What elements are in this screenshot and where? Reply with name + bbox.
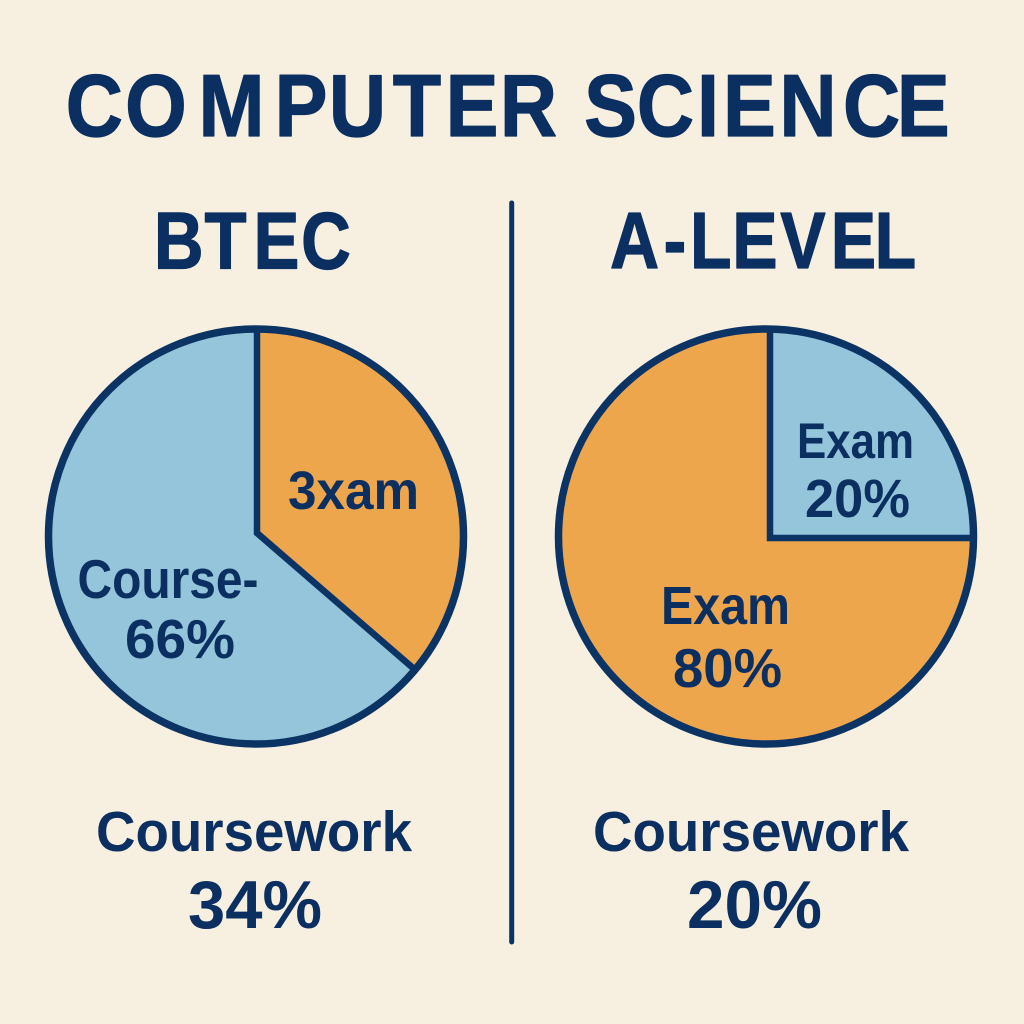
label: Exam (large): Exam <box>661 576 790 636</box>
caption label: Coursework <box>96 800 412 864</box>
heading: BTEC: BTEC <box>154 195 351 286</box>
BTEC coursework caption <box>96 800 412 943</box>
panel: A-Level pie chart <box>558 329 974 744</box>
label: 3xam: 3xam <box>288 461 419 521</box>
pie outline and dividers <box>558 329 974 744</box>
label: 80%: 80% <box>673 637 782 699</box>
slice: exam 34% <box>256 329 463 670</box>
slice: coursework 66% <box>48 329 464 744</box>
label: Exam (quarter): Exam <box>797 413 914 469</box>
A-Level coursework caption <box>593 800 909 943</box>
heading: A-LEVEL: A-LEVEL <box>610 196 916 285</box>
slice: exam 20% <box>771 329 973 538</box>
caption value: 20% <box>687 867 822 943</box>
centre divider <box>509 203 514 942</box>
title: COMPUTER SCIENCE <box>66 56 950 155</box>
caption label: Coursework <box>593 800 909 864</box>
slice: exam 80% <box>558 329 974 744</box>
label: 20%: 20% <box>805 469 910 529</box>
pie outline and dividers <box>48 329 464 744</box>
caption value: 34% <box>188 867 322 943</box>
panel: BTEC pie chart <box>48 329 464 744</box>
label: Course-: Course- <box>78 548 258 610</box>
label: 66%: 66% <box>125 608 235 670</box>
